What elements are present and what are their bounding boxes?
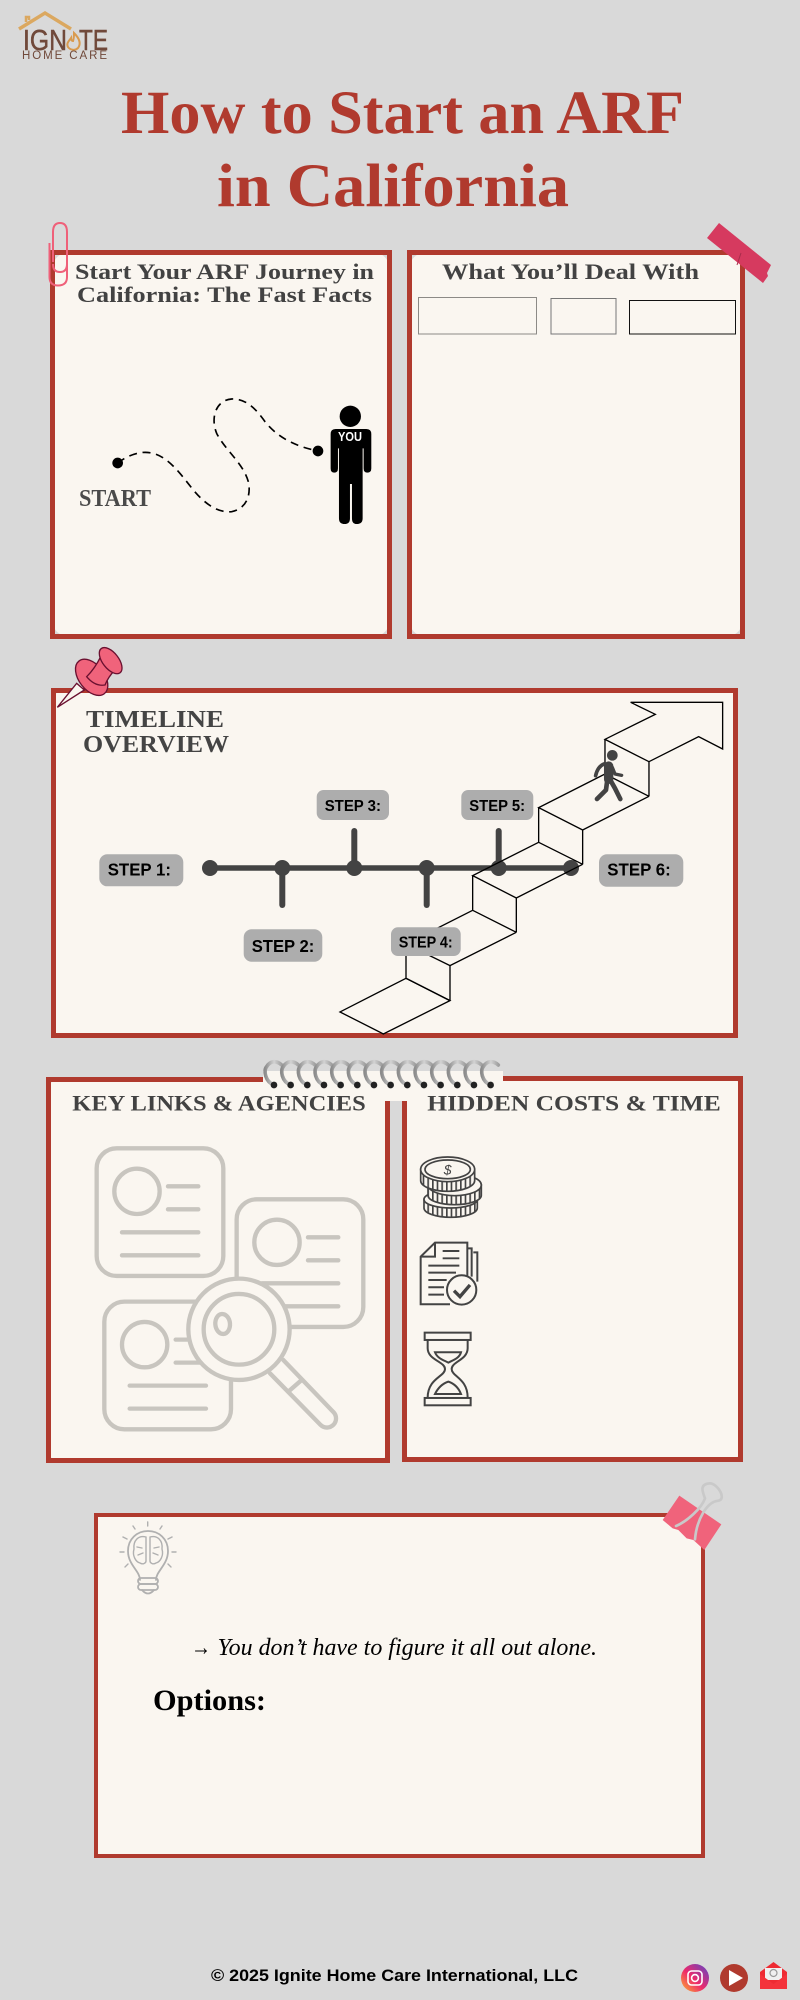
heading: timeline overview: OVERVIEW [83,732,229,758]
icon: instagram [681,1964,709,1992]
title: in California [217,153,569,220]
panel: hidden costs and time [404,1078,740,1460]
label: step 5: STEP 5: [469,798,525,815]
icon: hourglass [425,1333,471,1405]
logo: Ignite Home Care [19,13,108,62]
icon: push pin [57,644,126,707]
heading: options: Options: [153,1684,266,1717]
label: step 2 [244,929,322,962]
footer copyright: © 2025 Ignite Home Care International, LLC [211,1967,578,1985]
icon: profile cards with magnifier [97,1148,363,1429]
label: step 2: STEP 2: [252,936,314,956]
text: reassurance line: → [191,1635,211,1661]
text: reassurance line: You don’t have to figure it all out alone. [218,1635,597,1661]
heading: fast facts: Start Your ARF Journey in [75,259,374,284]
panel: timeline overview [54,690,736,1036]
label: step 1 [99,854,183,886]
label: step 6 [599,854,683,887]
label: step 3 [317,790,389,820]
empty box 1 [418,298,536,334]
timeline axis [202,831,579,905]
icon: person you: YOU [338,430,362,444]
heading: hidden costs: HIDDEN COSTS & TIME [427,1091,721,1116]
label: step 1: STEP 1: [108,860,171,880]
spiral notebook binding [263,1062,503,1101]
heading: what you'll deal with: What You’ll Deal With [442,259,699,284]
icon: brain light bulb [120,1522,176,1594]
empty box 3 [630,300,736,334]
icon: mail [760,1962,787,1989]
panel: what you'll deal with [410,252,742,636]
title: How to Start an ARF [121,80,684,147]
label: step 4 [391,927,461,956]
heading: fast facts: California: The Fast Facts [77,282,373,307]
staircase arrow [340,702,723,1034]
heading: key links: KEY LINKS & AGENCIES [72,1091,366,1116]
icon: washi tape [707,223,771,283]
logo: Ignite Home Care: HOME CARE [22,50,107,62]
icon: paperclip [50,223,67,286]
icon: coin stack: $ [443,1162,452,1178]
icon: play button [720,1964,748,1992]
heading: fast facts [75,259,374,307]
panel: key links and agencies [48,1080,388,1460]
empty box 2 [551,298,616,334]
label: step 3: STEP 3: [325,798,381,815]
label: step 6: STEP 6: [607,860,671,880]
dashed path from start to you [112,399,323,512]
logo: Ignite Home Care: TE [79,25,108,57]
icon: documents with check [421,1243,477,1305]
logo: Ignite Home Care: IGN [23,25,67,57]
panel: options [96,1515,703,1856]
panel: fast facts [52,252,390,636]
icon: walking person [596,750,622,799]
icon: binder clip [663,1483,722,1550]
label: start: START [79,486,151,512]
heading: timeline overview [83,707,229,758]
title [121,80,684,220]
icon: person you [331,406,371,524]
label: step 5 [461,790,533,820]
label: step 4: STEP 4: [399,934,453,951]
icon: coin stack [421,1157,481,1217]
heading: timeline overview: TIMELINE [86,707,224,733]
